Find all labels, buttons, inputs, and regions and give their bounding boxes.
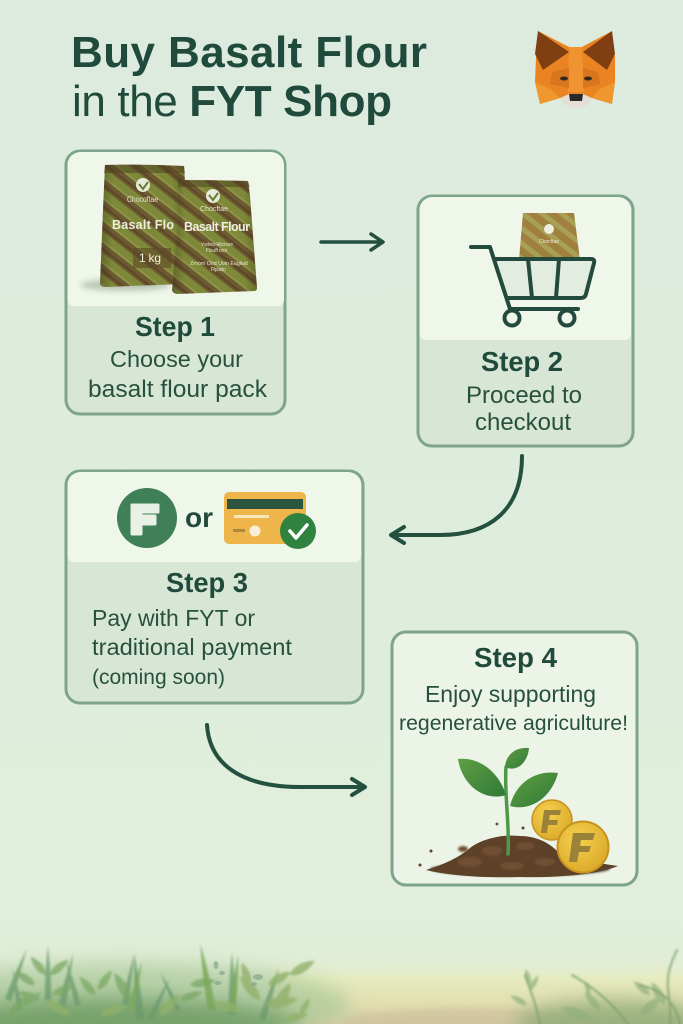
step 1 description: basalt flour pack	[88, 376, 268, 403]
icon: shopping cart with bag	[471, 213, 594, 326]
title: in the FYT Shop	[72, 77, 392, 126]
icon: seedling with soil and coins	[418, 748, 618, 877]
step 1 description: Choose your	[110, 346, 243, 372]
step 1 heading: Step 1	[135, 311, 215, 342]
icon: basalt flour bags: Basalt Flo	[112, 218, 174, 232]
step 2 description	[466, 382, 582, 436]
step 2 heading: Step 2	[481, 346, 563, 377]
step 3 heading: Step 3	[166, 567, 248, 598]
step 4 description: regenerative agriculture!	[399, 711, 628, 735]
arrow: step 3 to step 4	[207, 725, 365, 795]
step 3 description: Pay with FYT or	[92, 605, 255, 631]
arrow: step 1 to step 2	[321, 234, 383, 250]
title: Buy Basalt Flour	[71, 28, 427, 77]
step 4 description	[399, 681, 628, 735]
icon: payment card	[224, 492, 316, 549]
icon: basalt flour bags: Chocftae	[200, 204, 228, 213]
footer landscape: grass and field	[0, 943, 683, 1024]
step 2 description: checkout	[475, 409, 571, 436]
panel: step 3	[66, 471, 363, 703]
panel: step 2	[418, 196, 633, 446]
icon: shopping cart with bag: Chocftae	[539, 239, 559, 245]
step 4 description: Enjoy supporting	[425, 681, 596, 707]
title	[71, 28, 427, 126]
icon: basalt flour bags: Zrnom Ood Uoin Eagliatt	[190, 261, 248, 267]
arrow: step 2 to step 3	[391, 456, 522, 543]
step 3 description: (coming soon)	[92, 666, 225, 689]
icon: basalt flour bags: 1 kg	[139, 251, 161, 265]
icon: basalt flour bags: Basalt Flour	[184, 220, 250, 234]
step 3 description: traditional payment	[92, 634, 292, 660]
icon: basalt flour bags	[80, 165, 257, 294]
step 1 description	[88, 346, 268, 403]
panel: step 1	[66, 151, 285, 414]
step 2 description: Proceed to	[466, 382, 582, 409]
icon: fox logo	[535, 31, 615, 108]
panel: step 4	[392, 632, 637, 885]
icon: basalt flour bags: Chocoftae	[127, 195, 158, 204]
icon: basalt flour bags: Rpatc	[211, 267, 226, 273]
icon: FYT coin	[117, 488, 177, 548]
icon: basalt flour bags: Vnobers Hibonsen	[201, 242, 233, 248]
step 4 heading: Step 4	[474, 642, 558, 673]
step 3 description	[92, 605, 292, 689]
icon: basalt flour bags: Flouft mot	[206, 248, 227, 254]
or label: or	[185, 502, 213, 533]
